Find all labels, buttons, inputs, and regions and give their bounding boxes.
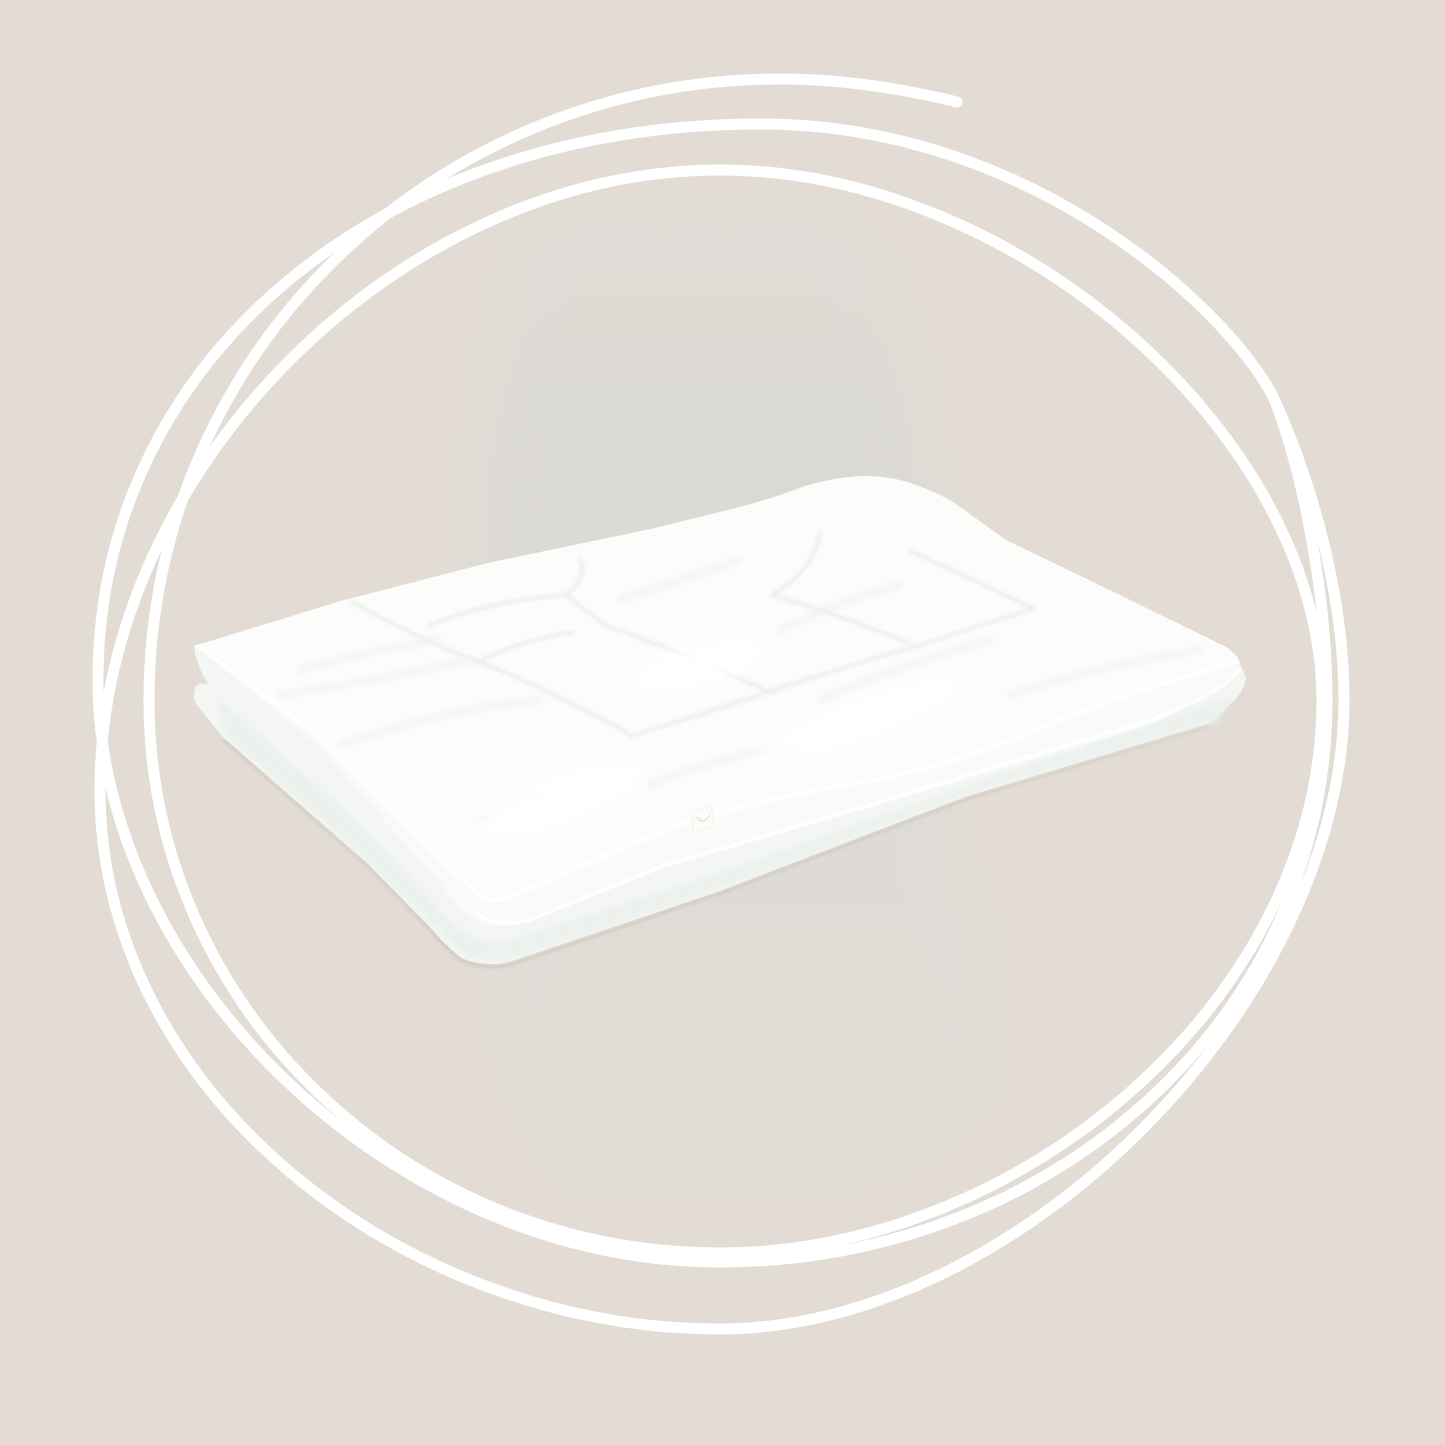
middle layer piping	[475, 668, 1240, 923]
hand-drawn white spiral circle	[98, 79, 1344, 1329]
sewn-in label	[691, 805, 714, 833]
folded white duvet	[194, 476, 1246, 966]
quilting seams and shadows	[352, 531, 1034, 737]
ground shadow along the front edge	[223, 725, 1210, 966]
bottom layer shading	[215, 695, 1235, 961]
middle layer	[200, 650, 1240, 926]
soft highlights	[467, 628, 970, 853]
soft grey backdrop patch	[485, 205, 992, 1190]
fabric wrinkles	[280, 560, 1200, 820]
duvet silhouette with bottom layers	[194, 476, 1246, 964]
top quilted flap	[194, 476, 1240, 901]
flap piping edge	[200, 647, 1238, 900]
